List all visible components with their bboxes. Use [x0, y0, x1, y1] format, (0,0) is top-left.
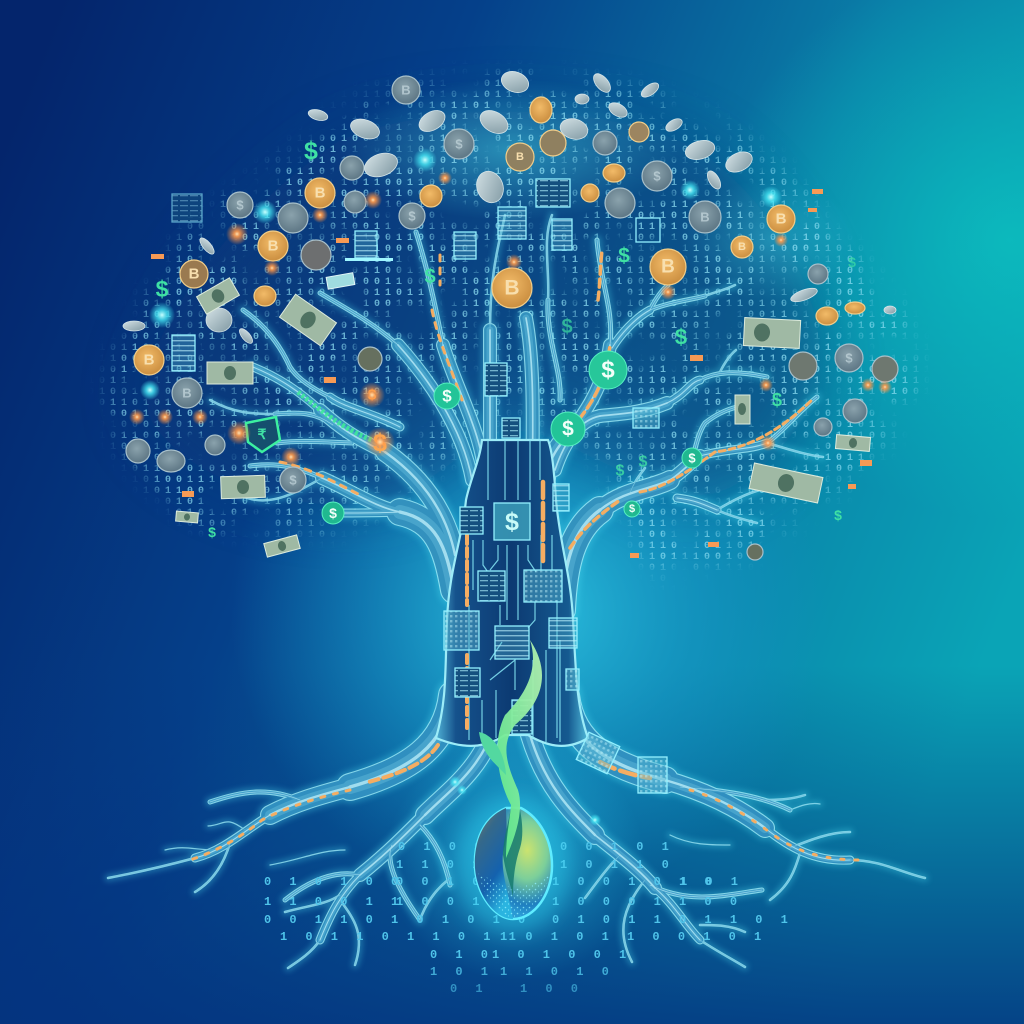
binary code rain under the roots: 0 1 0 1 0 0: [264, 875, 404, 889]
binary code rain under the roots: 1 0 1 1 0: [560, 858, 674, 872]
silver coins: B: [182, 386, 192, 400]
green and orange floating dollar signs: $: [561, 316, 573, 338]
binary code rain under the roots: 1 0 1: [680, 875, 744, 889]
tree trunk: [436, 440, 588, 746]
roots: [108, 695, 925, 968]
silver coins: $: [455, 136, 463, 152]
binary code rain under the roots: 1 0 1: [430, 965, 494, 979]
green dollar badges: $: [442, 386, 452, 406]
trunk orange data lines: [467, 482, 543, 730]
cyan glowing data nodes: [140, 148, 782, 826]
green and orange floating dollar signs: $: [834, 507, 842, 523]
flat tumbling coins: [123, 68, 896, 345]
gold bitcoin coins: B: [189, 266, 200, 282]
orange data streams on branches and roots: [190, 250, 860, 860]
green and orange floating dollar signs: [156, 137, 856, 540]
gold bitcoin coins: B: [144, 352, 155, 368]
binary digits forming the canopy: [90, 60, 940, 590]
green dollar badges: $: [688, 450, 696, 466]
gold bitcoin coins: B: [504, 276, 520, 300]
green dollar badges: $: [601, 356, 615, 384]
green dollar badges: $: [629, 503, 635, 515]
binary code rain under the roots: 0 1 0 0 1 0: [398, 840, 538, 854]
gold bitcoin coins: B: [738, 241, 746, 253]
tree branches: [210, 215, 823, 610]
binary code rain under the roots: 1 1 0 0 1 1: [264, 895, 404, 909]
panel: dollar chip: $: [505, 508, 519, 536]
green and orange floating dollar signs: $: [424, 266, 436, 288]
green and orange floating dollar signs: $: [616, 462, 625, 480]
binary code rain under the roots: 0 1: [450, 982, 488, 996]
dollar banknotes: [176, 273, 871, 557]
binary code rain under the roots: 0 1 0: [430, 948, 494, 962]
silver coins: $: [845, 350, 853, 366]
silver coins: B: [401, 82, 411, 98]
binary code rain under the roots: 0 0 1 0 1: [396, 875, 510, 889]
green and orange floating dollar signs: $: [848, 254, 856, 270]
green and orange floating dollar signs: $: [772, 390, 782, 410]
gold bitcoin coins: [134, 97, 865, 375]
green and orange floating dollar signs: $: [304, 137, 318, 165]
silver coins: $: [289, 472, 297, 488]
silver coins: B: [700, 210, 710, 224]
binary code rain under the roots: 1 1 0 1 0 1: [396, 858, 536, 872]
gold bitcoin coins: B: [661, 256, 675, 278]
gold bitcoin coins: B: [315, 184, 326, 202]
gold bitcoin coins: B: [516, 151, 524, 163]
sprout stem and leaves: [479, 640, 542, 858]
binary code rain under the roots: 1 0 0 1 0: [396, 895, 510, 909]
binary code rain under the roots: 0 0 1 1 0 1 0 1 0 1 0: [264, 913, 531, 927]
green and orange floating dollar signs: $: [208, 524, 216, 540]
panel: dollar chip: [494, 503, 530, 540]
canopy haze: [140, 80, 860, 505]
binary code rain under the roots: 1 0 0 1 0 1 0: [552, 875, 717, 889]
binary code rain under the roots: 1 0 1 0 1 1 0 0 1 0 1: [500, 930, 767, 944]
green and orange floating dollar signs: $: [618, 244, 630, 268]
binary code rain under the roots: 0 1 0 1 1 0 1 1 0 1: [552, 913, 793, 927]
trunk circuit panels: [444, 363, 667, 793]
binary code rain under the roots: 1 0 0 0 1 1 0 0: [552, 895, 743, 909]
green dollar badges: $: [329, 505, 337, 521]
green and orange floating dollar signs: $: [373, 429, 387, 457]
green and orange floating dollar signs: $: [368, 386, 377, 404]
seed: [455, 797, 571, 933]
binary code rain under the roots: 1 0 1 0 0 1: [492, 948, 632, 962]
binary code rain under the roots: 1 0 0: [520, 982, 584, 996]
canopy document panels: [172, 179, 660, 428]
green dollar badges: ₹: [258, 426, 267, 442]
trunk circuit lines: [469, 440, 560, 742]
green data stream on left branch: [298, 392, 372, 440]
orange data chips and glowing nodes: [129, 171, 892, 558]
silver coins: $: [653, 168, 661, 184]
green and orange floating dollar signs: $: [156, 276, 169, 302]
gold bitcoin coins: B: [776, 210, 787, 228]
green dollar badges: [246, 351, 702, 524]
binary code rain under the roots: 1 0 1 1 0 1 1 0 1 1: [280, 930, 521, 944]
green dollar badges: $: [562, 418, 574, 440]
gold bitcoin coins: B: [268, 238, 279, 254]
green and orange floating dollar signs: $: [675, 324, 687, 350]
binary code rain under the roots: 0 0 1 0 1: [560, 840, 674, 854]
silver coins: $: [236, 198, 244, 212]
green and orange floating dollar signs: $: [639, 454, 648, 470]
binary code rain under the roots: [264, 840, 793, 996]
binary code rain under the roots: 1 1 0 1 0: [500, 965, 614, 979]
silver coins: [126, 76, 898, 560]
silver coins: $: [408, 208, 416, 224]
